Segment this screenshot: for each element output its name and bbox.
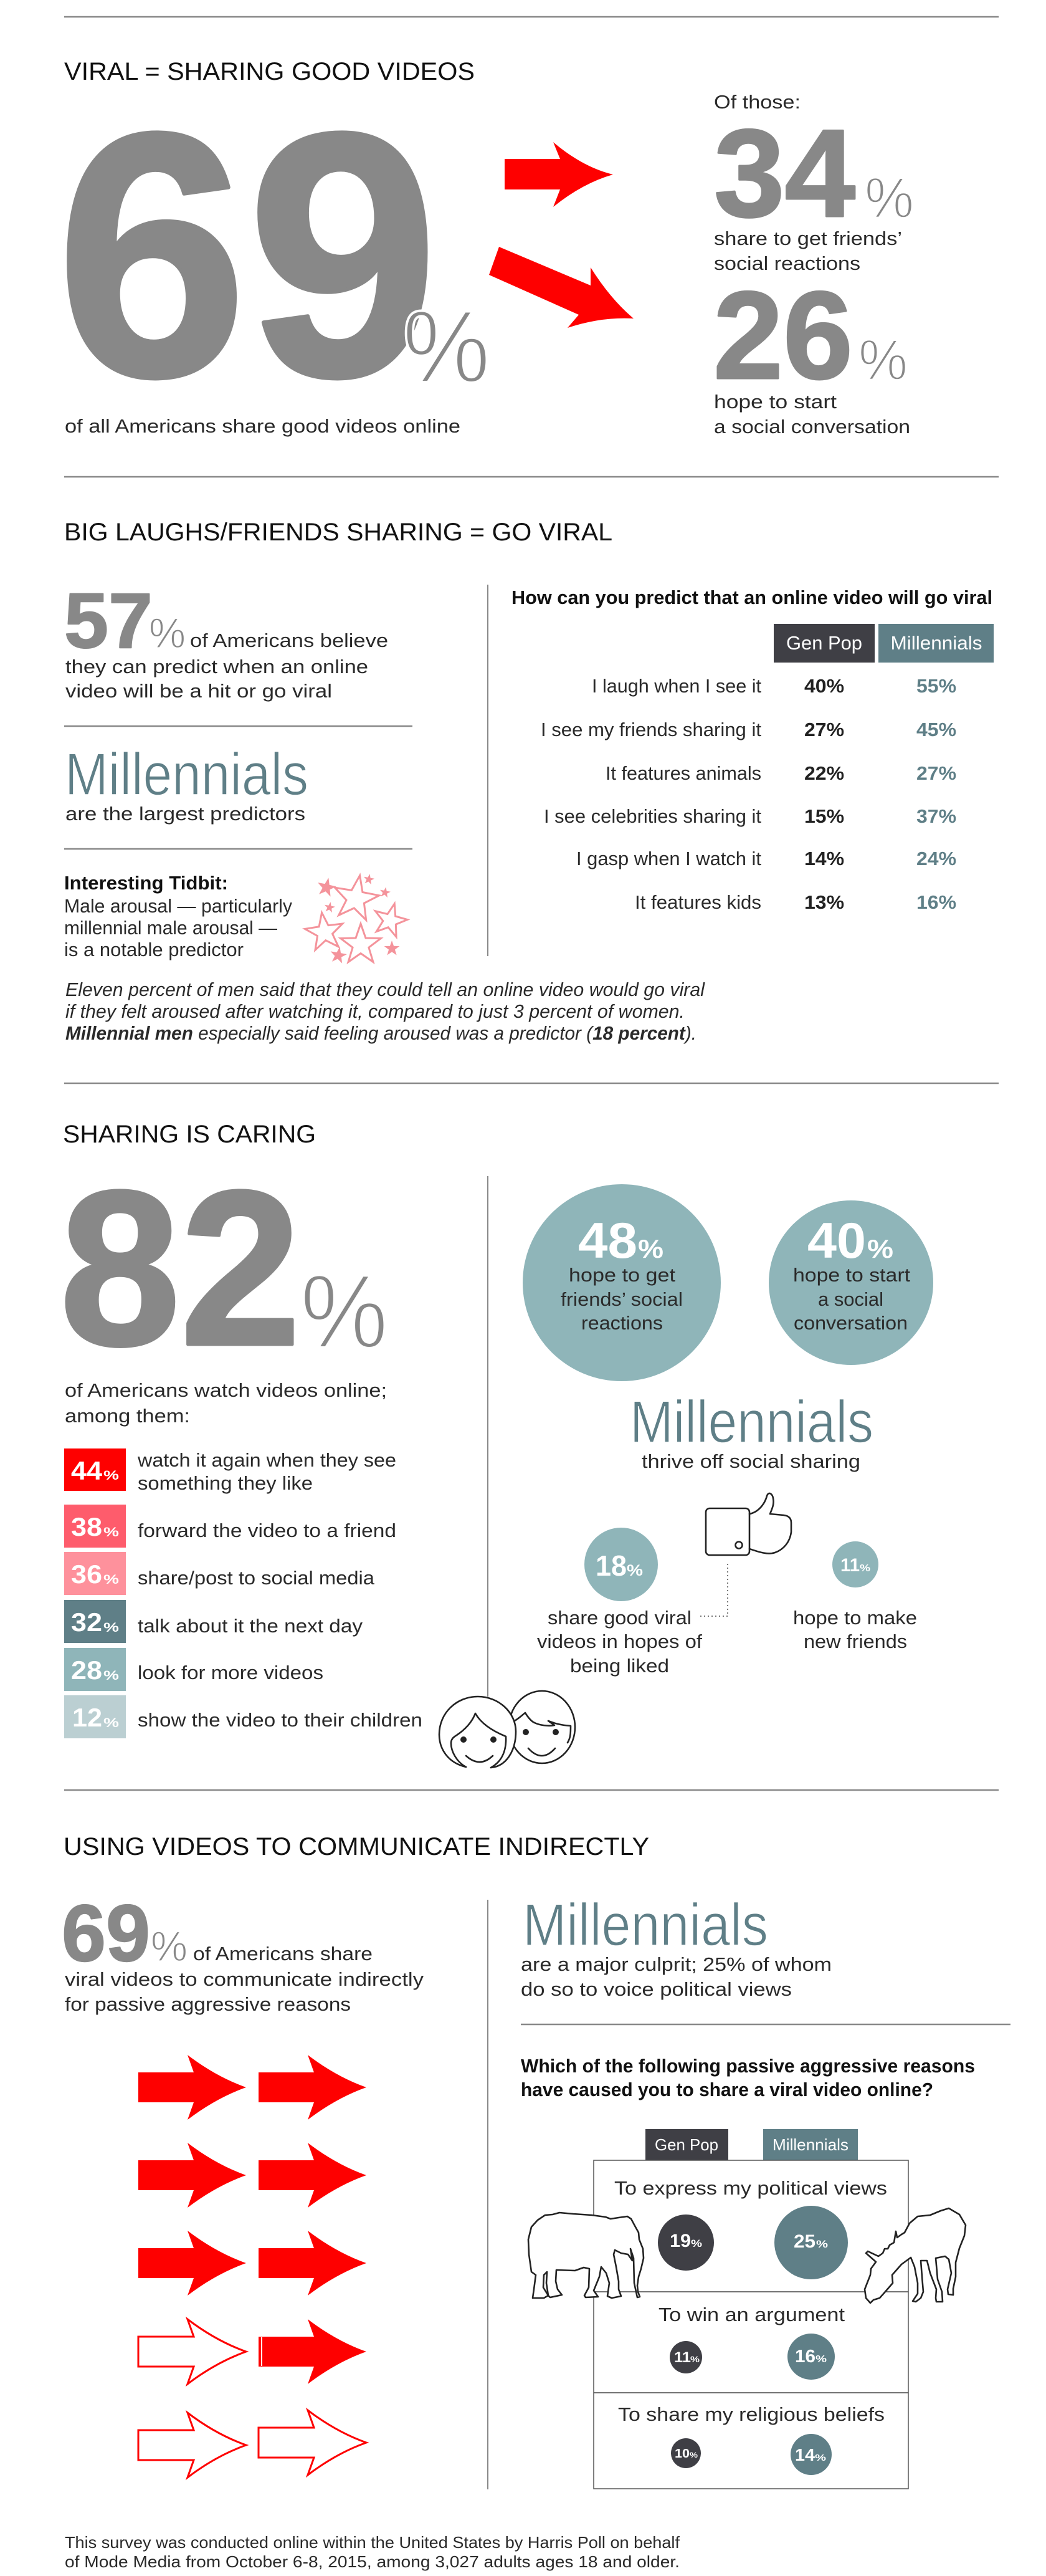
chart question: have caused you to share a viral video online? xyxy=(521,2079,933,2100)
dotted connector xyxy=(699,1564,728,1616)
row: religious beliefs: 14 xyxy=(795,2445,815,2464)
header: gen pop: Gen Pop xyxy=(786,632,862,654)
list item 36%: % xyxy=(103,1573,119,1587)
icon: donkey xyxy=(865,2208,966,2303)
chart question xyxy=(521,2055,975,2100)
circle: 40%: % xyxy=(867,1234,893,1263)
row: win an argument: 11 xyxy=(674,2349,691,2366)
arrow grid: 7 of 10 filled xyxy=(138,2055,366,2478)
stat 69%: 69 xyxy=(62,1889,150,1978)
tidbit text: Male arousal — particularly xyxy=(64,895,292,917)
row: religious beliefs: % xyxy=(690,2451,698,2459)
list item 32% xyxy=(64,1600,363,1643)
text: of those: Of those: xyxy=(714,91,801,113)
stat 26%: % xyxy=(858,328,908,392)
list item 32%: 32 xyxy=(71,1607,102,1637)
row: political views: % xyxy=(816,2238,828,2250)
circle: 48%: 48 xyxy=(578,1213,637,1269)
caption 18%: being liked xyxy=(570,1655,669,1677)
row: political views: 25 xyxy=(794,2231,815,2252)
italic note: Millennial men especially said feeling aroused was a predictor (18 percent). xyxy=(65,1022,697,1044)
caption 82%: among them: xyxy=(65,1405,190,1427)
caption 11%: hope to make xyxy=(793,1607,917,1629)
row: kids: 13% xyxy=(804,891,844,913)
caption 69%: viral videos to communicate indirectly xyxy=(65,1968,424,1990)
row: win an argument: % xyxy=(690,2354,700,2364)
list item 38%: % xyxy=(103,1525,119,1539)
caption 18% xyxy=(537,1607,702,1677)
list item 12%: 12 xyxy=(72,1703,102,1732)
row: friends: I see my friends sharing it xyxy=(541,719,761,740)
row: political views: % xyxy=(691,2238,702,2249)
stat 82%: 82 xyxy=(60,1146,301,1392)
row: friends xyxy=(541,719,956,740)
stat 34%: % xyxy=(865,166,914,230)
list item 12% xyxy=(64,1695,422,1738)
row: celebrities: 15% xyxy=(804,805,844,827)
arrow: lower right xyxy=(489,247,634,328)
text: 57% description: of Americans believe xyxy=(190,630,388,651)
face: girl xyxy=(439,1697,516,1768)
list item 32%: talk about it the next day xyxy=(138,1615,363,1637)
millennials caption: are the largest predictors xyxy=(65,803,305,825)
stat 34%: 34 xyxy=(714,104,855,243)
legend: gen pop xyxy=(645,2129,728,2160)
footer note xyxy=(65,2533,680,2571)
tidbit text: Interesting Tidbit: xyxy=(64,872,228,894)
legend: gen pop: Gen Pop xyxy=(655,2135,718,2154)
list item 38%: forward the video to a friend xyxy=(138,1520,396,1541)
text: 57% description: video will be a hit or go viral xyxy=(65,680,332,702)
row: win an argument xyxy=(659,2304,845,2380)
stat 26%: 26 xyxy=(713,266,853,405)
row: religious beliefs: 10 xyxy=(675,2447,690,2461)
row: laugh xyxy=(592,675,956,697)
stat 69%: % xyxy=(151,1923,188,1970)
list item 36%: share/post to social media xyxy=(138,1567,375,1589)
stat 57%: 57 xyxy=(64,578,153,664)
row: kids: It features kids xyxy=(635,891,761,913)
row: animals: It features animals xyxy=(606,762,761,784)
row: kids: 16% xyxy=(916,891,956,913)
row: gasp xyxy=(576,848,956,869)
heading: BIG LAUGHS/FRIENDS SHARING = GO VIRAL xyxy=(64,519,612,546)
list item 28%: % xyxy=(103,1669,119,1683)
icon: elephant xyxy=(528,2213,644,2298)
circle: 40%: 40 xyxy=(807,1213,866,1269)
legend: millennials: Millennials xyxy=(773,2135,849,2154)
row: laugh: I laugh when I see it xyxy=(592,675,761,697)
caption 69% xyxy=(65,1943,424,2015)
caption 34%: social reactions xyxy=(714,252,860,274)
header: millennials xyxy=(878,624,994,663)
circle: 18% xyxy=(584,1528,658,1601)
text: 57% description xyxy=(65,630,388,702)
list item 12%: % xyxy=(103,1716,119,1730)
list item 44% xyxy=(64,1448,396,1494)
row: gasp: 14% xyxy=(804,848,844,869)
list item 44%: watch it again when they see xyxy=(137,1449,396,1471)
table title: How can you predict that an online video will go viral xyxy=(511,587,992,608)
heading: VIRAL = SHARING GOOD VIDEOS xyxy=(64,58,475,85)
caption 69%: for passive aggressive reasons xyxy=(65,1993,351,2015)
row: celebrities xyxy=(544,805,956,827)
stat 57%: % xyxy=(149,610,186,657)
caption 34% xyxy=(714,227,902,274)
list item 44%: something they like xyxy=(138,1472,313,1494)
caption 26% xyxy=(714,391,910,438)
row: political views: To express my political views xyxy=(614,2177,887,2199)
millennials caption: thrive off social sharing xyxy=(642,1450,860,1472)
big stat 69%: % xyxy=(402,289,490,404)
list item 44%: % xyxy=(103,1468,119,1483)
row: friends: 27% xyxy=(804,719,844,740)
list item 36% xyxy=(64,1552,375,1595)
header: millennials: Millennials xyxy=(891,632,982,654)
caption 11% xyxy=(793,1607,917,1652)
circle: 40%: hope to start xyxy=(793,1264,910,1286)
millennials caption: are a major culprit; 25% of whom xyxy=(521,1953,832,1975)
legend: millennials xyxy=(763,2129,858,2160)
caption 34%: share to get friends’ xyxy=(714,227,902,249)
panel: viral = sharing good videos xyxy=(56,58,914,449)
row: celebrities: 37% xyxy=(916,805,956,827)
list item 38%: 38 xyxy=(71,1512,102,1541)
list item 44%: 44 xyxy=(71,1456,103,1485)
row: religious beliefs: To share my religious beliefs xyxy=(618,2403,885,2425)
row: political views: 19 xyxy=(670,2231,691,2251)
list item 32%: % xyxy=(103,1621,119,1635)
tidbit text: millennial male arousal — xyxy=(64,917,277,939)
stat 34% xyxy=(714,104,914,243)
circle: 48%: % xyxy=(638,1234,663,1263)
panel: big laughs xyxy=(64,519,994,1044)
caption 18%: share good viral xyxy=(548,1607,692,1629)
footer note: of Mode Media from October 6-8, 2015, among 3,027 adults ages 18 and older. xyxy=(65,2552,680,2571)
row: gasp: I gasp when I watch it xyxy=(576,848,761,869)
footer note: This survey was conducted online within the United States by Harris Poll on behalf xyxy=(65,2533,680,2552)
stat 82%: % xyxy=(300,1253,388,1370)
list item 12%: show the video to their children xyxy=(138,1709,422,1731)
row: friends: 45% xyxy=(916,719,956,740)
big stat 69%: 69 xyxy=(56,61,439,449)
caption 82% xyxy=(65,1379,387,1427)
heading: SHARING IS CARING xyxy=(63,1121,316,1148)
caption 69%: of all Americans share good videos online xyxy=(65,415,460,437)
heading: USING VIDEOS TO COMMUNICATE INDIRECTLY xyxy=(64,1833,649,1860)
millennials heading: Millennials xyxy=(630,1389,873,1455)
list item 38% xyxy=(64,1505,396,1548)
caption 18%: videos in hopes of xyxy=(537,1630,702,1652)
panel: using videos to communicate indirectly xyxy=(62,1833,1010,2571)
circle: 18%: 18 xyxy=(596,1549,627,1582)
list item 28%: 28 xyxy=(71,1655,102,1685)
bubble chart table xyxy=(594,2160,908,2489)
circle: 18%: % xyxy=(627,1562,643,1579)
list item 36%: 36 xyxy=(71,1559,102,1589)
row: kids xyxy=(635,891,956,913)
row: animals: 22% xyxy=(804,762,844,784)
arrow: upper right xyxy=(505,142,613,207)
icon: girl and boy faces xyxy=(439,1691,575,1768)
millennials heading: Millennials xyxy=(65,741,308,808)
caption 26%: a social conversation xyxy=(714,416,910,438)
row: win an argument: 16 xyxy=(795,2347,815,2367)
millennials heading: Millennials xyxy=(523,1892,768,1958)
row: religious beliefs: % xyxy=(815,2453,826,2463)
millennials caption xyxy=(521,1953,832,2000)
row: gasp: 24% xyxy=(916,848,956,869)
row: celebrities: I see celebrities sharing it xyxy=(544,805,761,827)
panel: sharing is caring xyxy=(60,1121,933,1768)
header: gen pop xyxy=(774,624,875,663)
row: animals: 27% xyxy=(916,762,956,784)
tidbit text xyxy=(64,872,292,960)
circle: 48%: hope to get xyxy=(569,1264,675,1286)
caption 26%: hope to start xyxy=(714,391,837,413)
circle: 48%: friends’ social xyxy=(561,1288,683,1310)
italic note: if they felt aroused after watching it, compared to just 3 percent of women. xyxy=(65,1000,685,1022)
caption 69%: of Americans share xyxy=(193,1943,373,1965)
row: religious beliefs xyxy=(618,2403,885,2475)
row: win an argument: To win an argument xyxy=(659,2304,845,2325)
circle: 11%: 11 xyxy=(840,1555,860,1576)
circle: 11%: % xyxy=(860,1563,870,1574)
chart question: Which of the following passive aggressive reasons xyxy=(521,2055,975,2077)
list item 28% xyxy=(64,1648,323,1691)
tidbit text: is a notable predictor xyxy=(64,939,244,960)
circle: 40%: a social xyxy=(818,1288,883,1310)
list item 28%: look for more videos xyxy=(138,1662,323,1683)
italic note xyxy=(65,979,705,1044)
row: laugh: 55% xyxy=(916,675,956,697)
row: win an argument: % xyxy=(815,2354,827,2365)
row: animals xyxy=(606,762,956,784)
row: laugh: 40% xyxy=(804,675,844,697)
caption 82%: of Americans watch videos online; xyxy=(65,1379,387,1401)
millennials caption: do so to voice political views xyxy=(521,1978,792,2000)
circle: 40% xyxy=(769,1200,933,1365)
row: political views xyxy=(614,2177,887,2279)
circle: 40%: conversation xyxy=(794,1312,908,1334)
table: predictors xyxy=(541,624,994,913)
circle: 11% xyxy=(832,1541,878,1587)
icon: thumbs up xyxy=(706,1493,791,1555)
caption 11%: new friends xyxy=(804,1630,907,1652)
text: 57% description: they can predict when an online xyxy=(65,656,368,678)
icon: stars xyxy=(303,871,411,964)
face: boy xyxy=(509,1691,575,1763)
circle: 48% xyxy=(523,1184,721,1381)
circle: 48%: reactions xyxy=(581,1312,663,1334)
italic note: Eleven percent of men said that they could tell an online video would go viral xyxy=(65,979,705,1000)
